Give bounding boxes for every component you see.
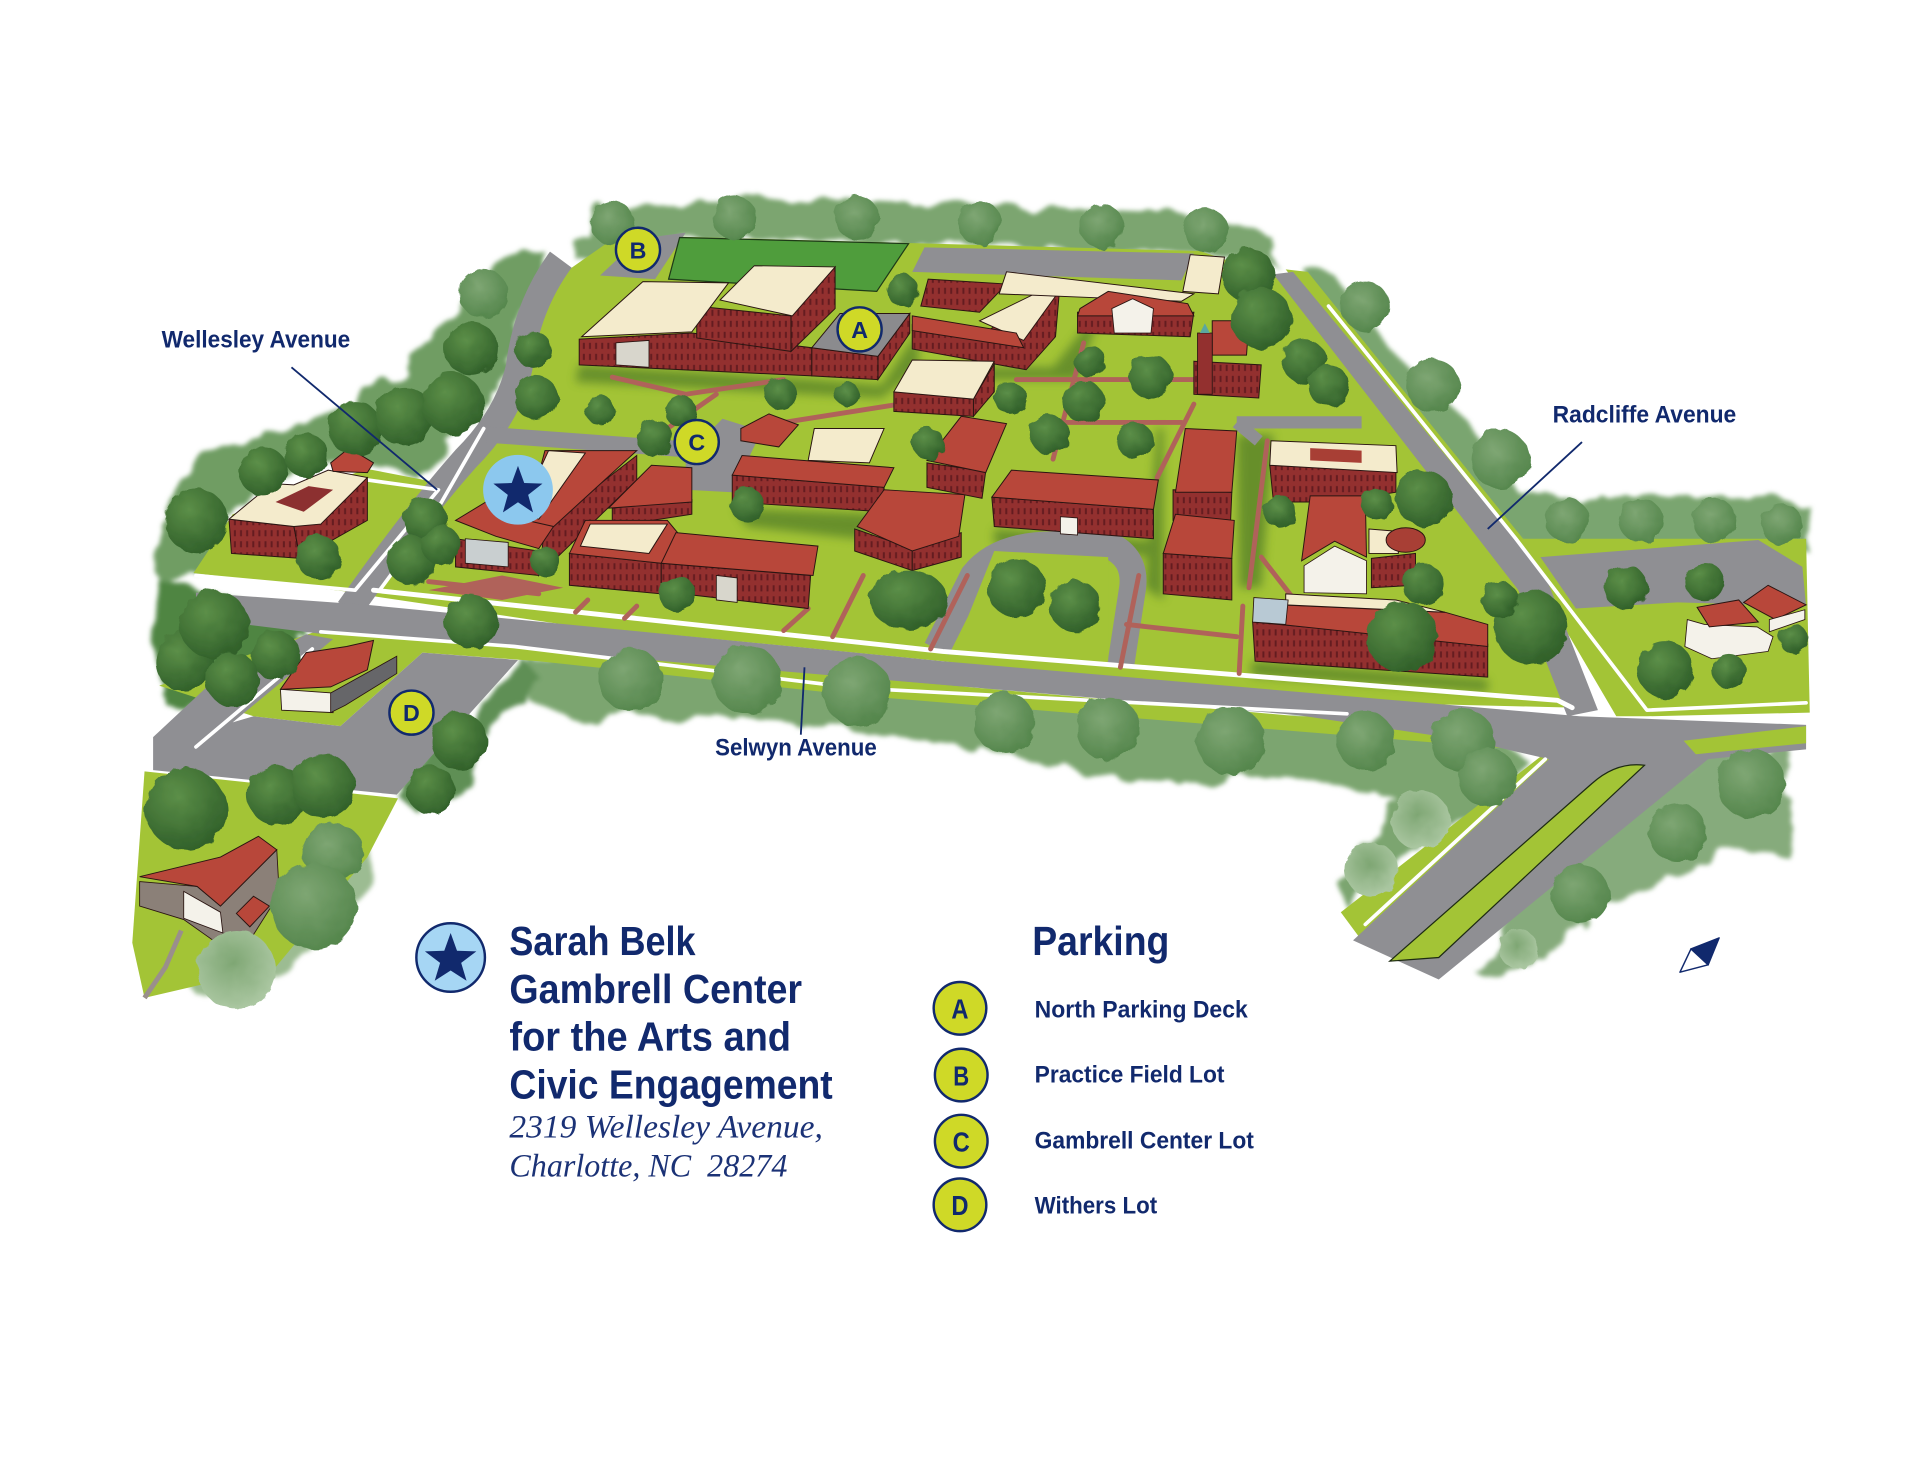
map marker C: C	[688, 430, 705, 456]
building: North Parking Deck	[812, 313, 910, 380]
legend icon: star	[416, 923, 485, 992]
label: Selwyn Avenue: Selwyn Avenue	[715, 734, 877, 761]
callout line: Radcliffe Avenue	[1488, 442, 1582, 529]
legend row C: C	[953, 1127, 970, 1158]
northwest lawn around left building	[194, 469, 443, 593]
building: east cream roof hall	[1270, 441, 1397, 502]
road: front circle drive	[937, 545, 1133, 667]
callout line: Wellesley Avenue	[291, 367, 437, 490]
building: chapel	[1302, 496, 1425, 594]
text: address: 2319 Wellesley Avenue,	[509, 1109, 823, 1145]
building: central cottage hall	[855, 490, 965, 571]
road: rear service loop	[1237, 422, 1362, 441]
building: east house	[1685, 585, 1806, 659]
road: Wellesley Avenue	[349, 260, 561, 610]
heading: center name: Gambrell Center	[509, 966, 802, 1012]
practice field	[669, 238, 909, 291]
building: Gambrell Center	[429, 451, 637, 600]
legend row B: B	[953, 1060, 969, 1091]
south hedge lawn strip	[1341, 757, 1558, 940]
legend row D: Withers Lot	[1035, 1192, 1157, 1219]
trees	[146, 196, 1809, 1009]
building: arts hall	[569, 520, 680, 594]
building: columned north hall	[1078, 291, 1194, 337]
legend row A: North Parking Deck	[1035, 996, 1248, 1023]
building: upper dorm	[1173, 429, 1237, 520]
map marker D: D	[403, 700, 420, 726]
map marker B: B	[630, 237, 646, 263]
label: Wellesley Avenue: Wellesley Avenue	[162, 327, 350, 354]
legend row C	[935, 1115, 1254, 1167]
building: north gym complex	[579, 266, 835, 376]
legend row B	[935, 1049, 1224, 1101]
map marker B	[616, 228, 660, 272]
callout line: Selwyn Avenue	[801, 667, 804, 735]
building: science hall with atrium	[1253, 594, 1488, 677]
road: B lot	[600, 233, 686, 279]
road: Selwyn Avenue and southeast boulevard	[196, 593, 1806, 980]
sidewalks	[196, 306, 1806, 924]
legend row A: A	[951, 994, 969, 1025]
building: main quad hall	[992, 470, 1158, 539]
brick paths	[429, 343, 1304, 673]
map marker C	[675, 420, 719, 464]
map marker A	[838, 307, 882, 351]
building: west residence hall	[229, 448, 374, 558]
foliage: perimeter hedges	[149, 196, 1806, 994]
building: north science complex	[912, 255, 1224, 370]
legend row D	[934, 1179, 1157, 1231]
heading: center name: for the Arts and	[509, 1014, 791, 1060]
road: east parking lot	[1540, 540, 1806, 609]
roads	[153, 233, 1806, 980]
south lawn strip	[159, 631, 1573, 749]
map marker D	[389, 691, 433, 735]
legend row C: Gambrell Center Lot	[1035, 1128, 1254, 1155]
building: cream-roof hall	[894, 360, 994, 416]
label: Radcliffe Avenue: Radcliffe Avenue	[1553, 401, 1736, 428]
building: lower dorm	[1163, 514, 1234, 600]
east road island	[1684, 726, 1806, 754]
heading: Parking: Parking	[1032, 918, 1169, 964]
legend: parking lots	[934, 982, 1254, 1231]
Radcliffe green strip	[1286, 269, 1543, 569]
building: central hall	[732, 414, 894, 512]
road: C lot and entry	[487, 435, 686, 449]
east lawn	[1512, 539, 1810, 716]
heading: center name: Sarah Belk	[509, 918, 696, 964]
heading: center name: Civic Engagement	[509, 1061, 833, 1107]
building: south academic hall	[661, 533, 818, 609]
building: clock tower hall	[1194, 321, 1261, 398]
median green	[1390, 765, 1644, 961]
building: north red hall	[927, 416, 1007, 498]
legend row B: Practice Field Lot	[1035, 1061, 1224, 1088]
road: top parking	[912, 247, 1194, 280]
lawn shadows	[576, 306, 1488, 692]
map marker A: A	[851, 317, 868, 343]
legend row D: D	[951, 1190, 969, 1221]
road: Withers entry and lot D	[153, 634, 518, 795]
road: Radcliffe Avenue	[1273, 272, 1598, 716]
building: central east block	[609, 465, 692, 527]
front circle lawn	[955, 551, 1108, 661]
southwest lawn	[132, 771, 398, 998]
main campus lawn	[358, 235, 1577, 708]
building: Withers house	[280, 640, 397, 713]
building: southwest manor	[140, 836, 279, 998]
map marker: Gambrell Center star	[483, 455, 553, 525]
legend row A	[934, 982, 1248, 1035]
icon: compass	[1680, 938, 1719, 972]
text: address: Charlotte, NC 28274	[509, 1149, 787, 1185]
